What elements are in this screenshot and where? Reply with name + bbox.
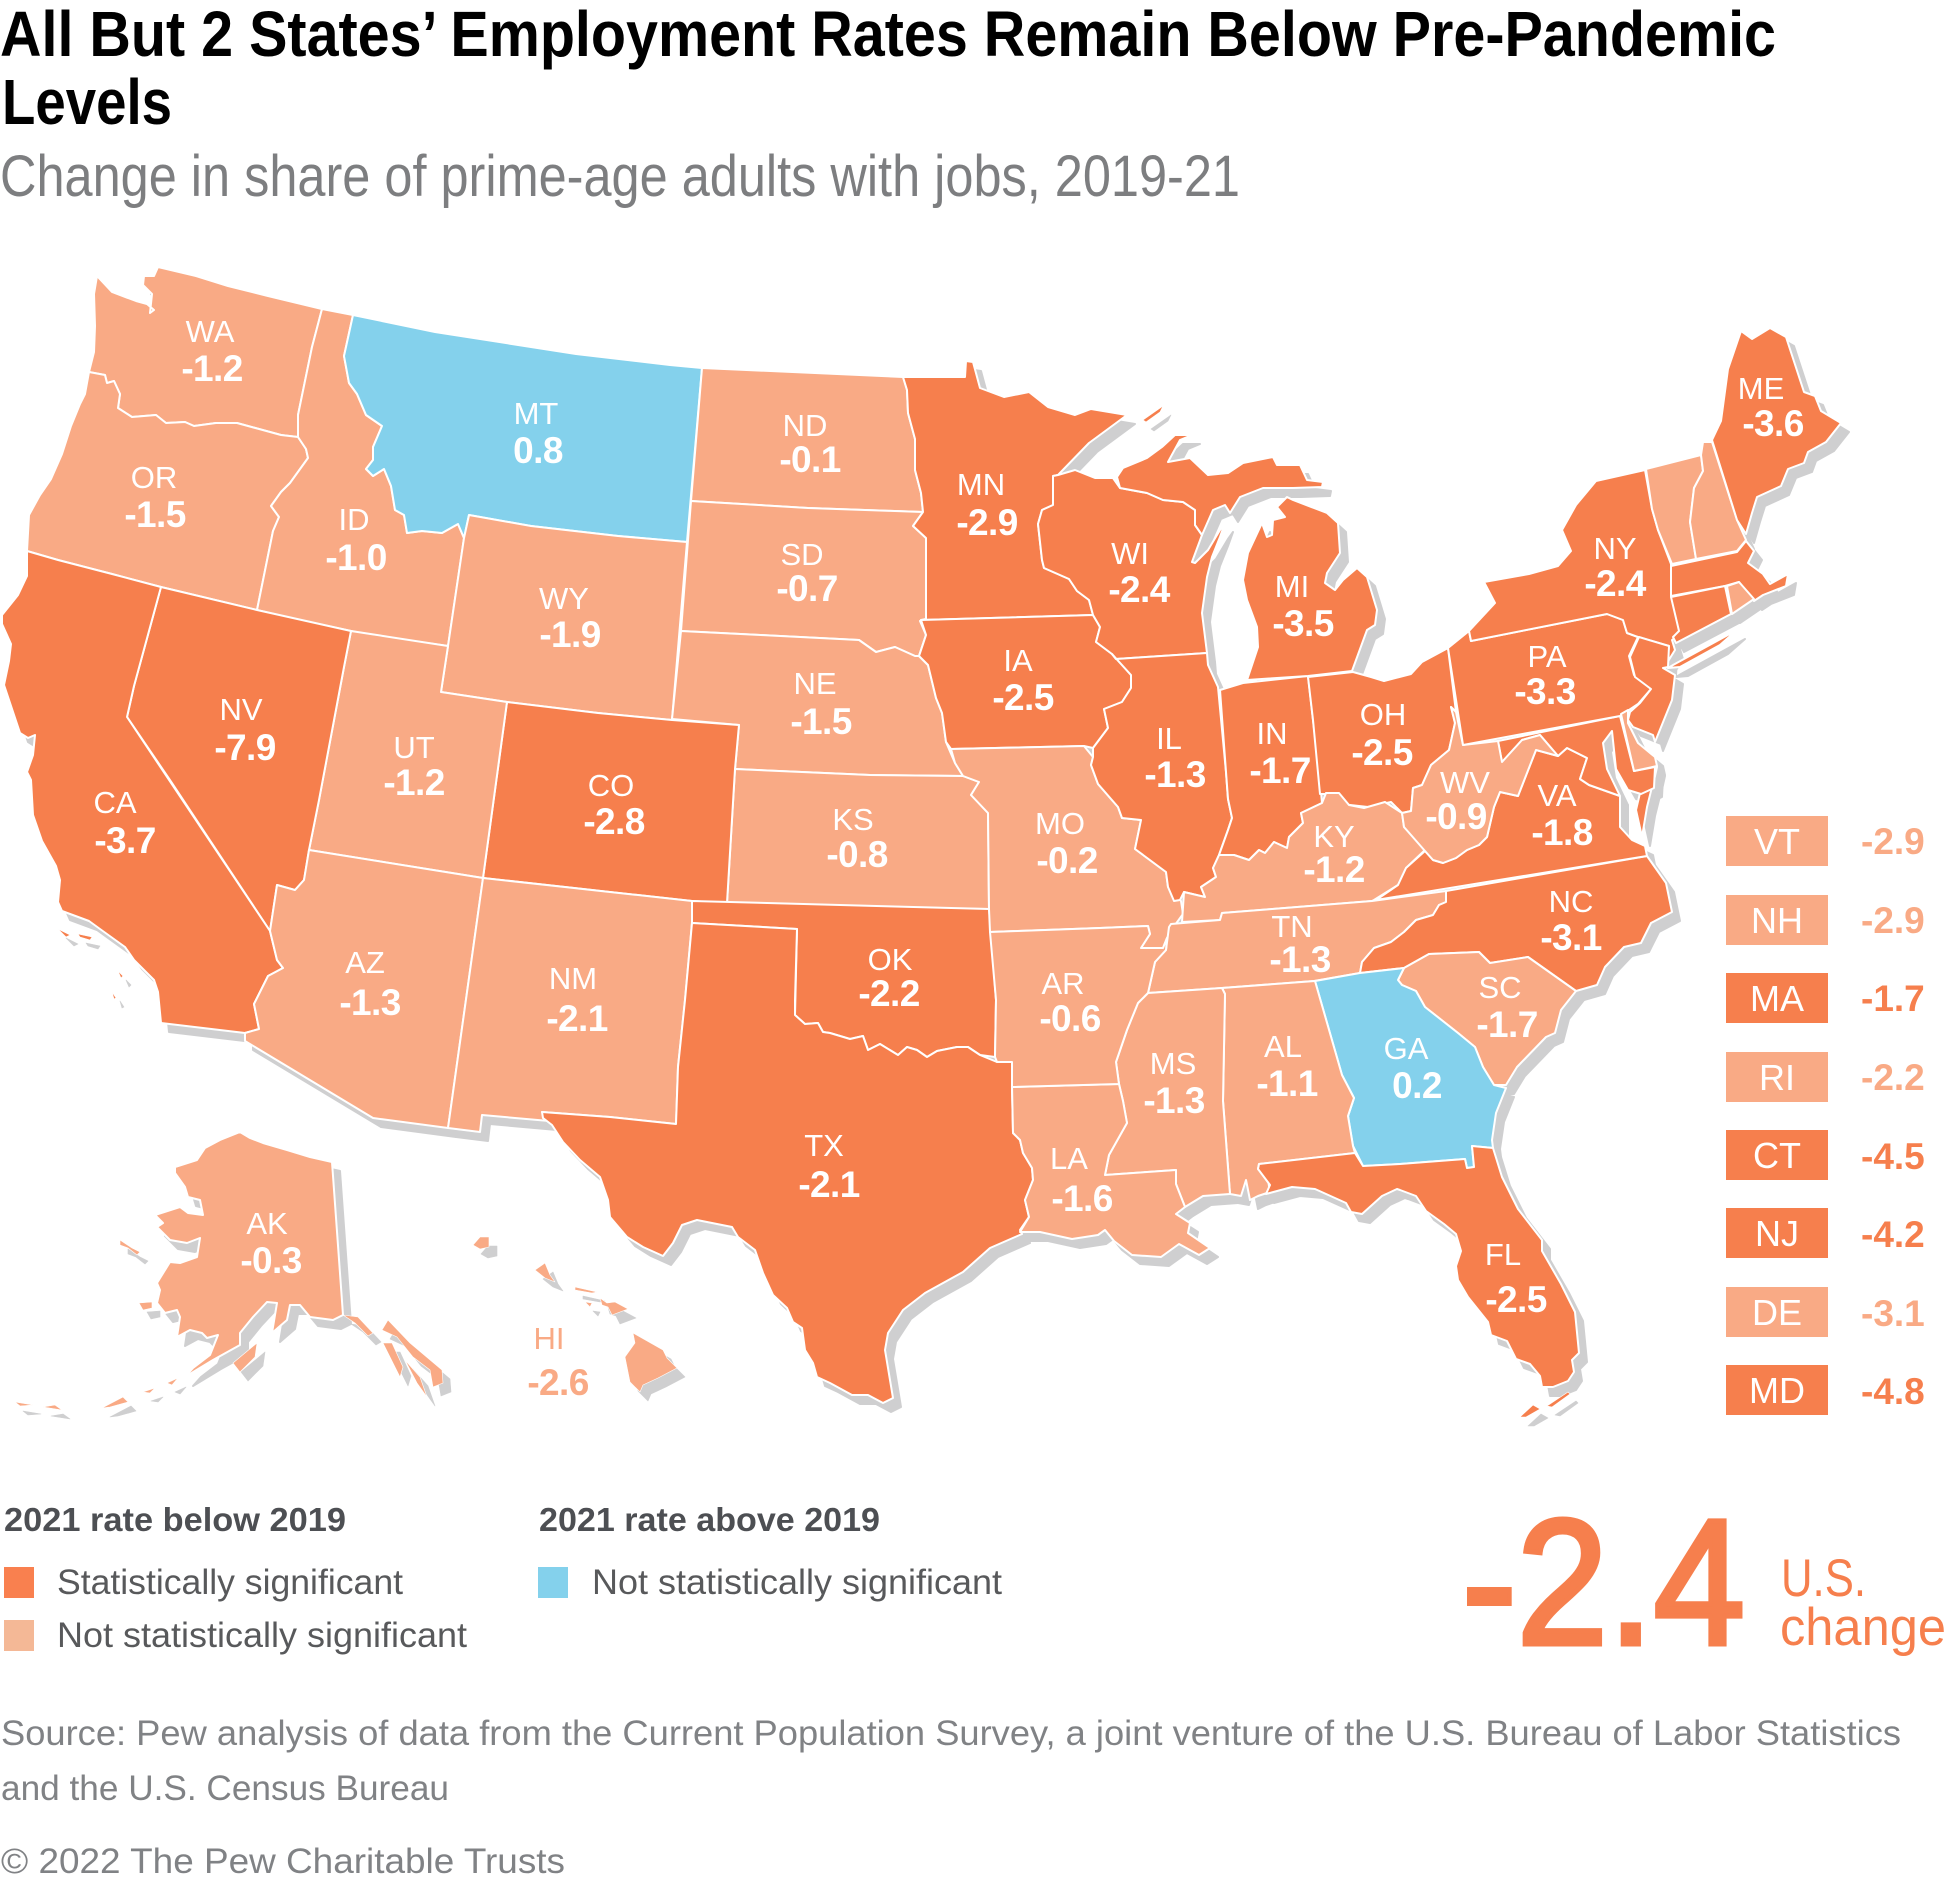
state: TN — [1148, 891, 1446, 993]
label: CO: -2.8 — [583, 801, 645, 842]
label: TN — [1269, 909, 1331, 980]
side item: CT: -4.5 — [1861, 1136, 1925, 1177]
label: AZ — [339, 945, 401, 1023]
label: SD: SD — [780, 537, 824, 572]
label: MT — [513, 396, 563, 471]
label: NV: NV — [219, 692, 263, 727]
label: IN: -1.7 — [1249, 750, 1311, 791]
side item: DE: DE — [1752, 1292, 1802, 1333]
label: OK: OK — [868, 942, 913, 977]
island: Santa Catalina — [118, 971, 123, 978]
side item: MA: -1.7 — [1861, 978, 1925, 1019]
side item: DE: -3.1 — [1861, 1293, 1925, 1334]
state: VT — [1646, 455, 1703, 564]
island: Aleutians central — [143, 1388, 155, 1393]
label: CA: -3.7 — [94, 820, 156, 861]
label: MT: MT — [514, 396, 558, 431]
legend: rate below 2019 — [4, 1501, 467, 1655]
state: MI lower peninsula — [1243, 497, 1377, 680]
label: TN: -1.3 — [1269, 939, 1331, 980]
state: AR — [990, 926, 1167, 1087]
label: MO — [1035, 806, 1098, 881]
callout label: change — [1780, 1598, 1946, 1657]
legend text: above not significant: Not statistically significant — [592, 1563, 1002, 1602]
label: OR — [124, 460, 186, 535]
state: IA — [919, 615, 1131, 749]
state: GA — [1315, 968, 1506, 1168]
island: Long Island — [1668, 630, 1737, 668]
label: CO: CO — [588, 768, 634, 803]
state: DE — [1621, 710, 1657, 771]
label: NY: NY — [1593, 531, 1637, 566]
state: CO — [483, 702, 739, 903]
label: AL: AL — [1264, 1029, 1302, 1064]
label: TX: TX — [804, 1128, 844, 1163]
label: NY: -2.4 — [1584, 563, 1647, 604]
label: VA — [1531, 778, 1593, 853]
label: LA — [1050, 1141, 1113, 1219]
island: Alaska panhandle island B — [405, 1360, 427, 1397]
label: WA — [181, 314, 243, 389]
state: OH — [1308, 648, 1456, 813]
side item: MD: MD — [1749, 1370, 1805, 1411]
label: NM: -2.1 — [546, 998, 608, 1039]
label: MS — [1143, 1046, 1205, 1121]
label: WV: -0.9 — [1425, 796, 1487, 837]
label: IN: IN — [1256, 716, 1288, 751]
island: Kodiak — [233, 1343, 257, 1372]
state: LA — [1012, 1084, 1210, 1257]
big number: -2.4 — [1462, 1482, 1745, 1682]
legend text: significant: Statistically significant — [57, 1563, 403, 1602]
label: ME — [1738, 371, 1804, 444]
side item: VT: -2.9 — [1861, 821, 1925, 862]
side item: NH — [1726, 895, 1925, 945]
label: NC — [1540, 884, 1602, 958]
state: NE — [672, 631, 963, 776]
island: Aleutians western — [43, 1405, 62, 1410]
label: GA: GA — [1384, 1031, 1429, 1066]
label: AK: -0.3 — [240, 1240, 302, 1281]
state: SC — [1398, 952, 1576, 1085]
label: ID — [325, 502, 387, 578]
label: CO — [583, 768, 645, 842]
island: St. Lawrence — [120, 1240, 140, 1255]
label: NY — [1584, 531, 1647, 604]
state: CA — [2, 551, 283, 1033]
label: AR: AR — [1041, 966, 1085, 1001]
label: OK — [858, 942, 920, 1014]
label: TN: TN — [1271, 909, 1313, 944]
state: AZ — [245, 850, 483, 1128]
label: PA: PA — [1527, 639, 1567, 674]
side item: CT: CT — [1753, 1135, 1801, 1176]
island: Hawaii — [625, 1333, 677, 1392]
label: SC: -1.7 — [1476, 1004, 1538, 1045]
label: WA: -1.2 — [181, 348, 243, 389]
label: OR: -1.5 — [124, 494, 186, 535]
side list: small northeastern states — [1726, 816, 1925, 1415]
label: KY: KY — [1313, 819, 1355, 854]
state labels — [93, 314, 1804, 1403]
label: AK: AK — [246, 1206, 288, 1241]
label: ND: ND — [783, 408, 827, 443]
label: IA: IA — [1003, 643, 1033, 678]
label: MS: -1.3 — [1143, 1080, 1205, 1121]
state: OR — [27, 372, 308, 610]
label: AZ: AZ — [345, 945, 385, 980]
island: Maui — [600, 1298, 628, 1315]
state: AL — [1222, 981, 1355, 1200]
label: IL: IL — [1156, 721, 1182, 756]
island: San Clemente — [112, 992, 116, 999]
label: NV — [214, 692, 276, 768]
label: MN: -2.9 — [956, 502, 1018, 543]
state: AK — [155, 1132, 343, 1377]
island: Florida Keys — [1547, 1392, 1570, 1407]
label: LA: LA — [1050, 1141, 1088, 1176]
label: WA: WA — [186, 314, 235, 349]
label: KS — [826, 802, 888, 875]
label: TX — [798, 1128, 860, 1205]
state: FL — [1258, 1146, 1579, 1387]
label: OH: OH — [1360, 697, 1406, 732]
label: IL: -1.3 — [1144, 754, 1206, 795]
label: NC: NC — [1549, 884, 1593, 919]
state: MS — [1105, 988, 1230, 1207]
label: IA — [992, 643, 1054, 718]
label: IN — [1249, 716, 1311, 791]
state: WY — [441, 515, 687, 720]
label: TX: -2.1 — [798, 1164, 860, 1205]
state: WA — [89, 267, 322, 437]
state: MA — [1671, 541, 1788, 601]
island: Oahu — [535, 1263, 555, 1282]
callout: U.S. change — [1462, 1482, 1946, 1682]
label: FL — [1485, 1237, 1547, 1320]
legend swatch: above not significant — [538, 1567, 568, 1598]
label: CA — [93, 785, 156, 861]
label: SC — [1476, 970, 1538, 1045]
state: WI — [1038, 470, 1225, 659]
state: IL — [1091, 653, 1232, 901]
state: NC — [1360, 856, 1672, 991]
state: NJ — [1628, 637, 1675, 742]
legend: rate above 2019 — [538, 1501, 1002, 1602]
label: SC: SC — [1478, 970, 1522, 1005]
label: IA: -2.5 — [992, 677, 1054, 718]
island: Aleutians far west — [15, 1402, 33, 1406]
label: PA: -3.3 — [1514, 671, 1576, 712]
label: ID: -1.0 — [325, 537, 387, 578]
state: RI — [1727, 582, 1754, 614]
label: NE — [790, 666, 852, 742]
state: MN — [903, 361, 1127, 620]
callout label: U.S. — [1781, 1549, 1866, 1608]
state: MD — [1498, 716, 1655, 796]
state: CT — [1671, 586, 1731, 643]
label: WI: -2.4 — [1108, 569, 1171, 610]
label: ND: -0.1 — [779, 439, 841, 480]
legend text: not significant: Not statistically significant — [57, 1616, 467, 1655]
label: ME: -3.6 — [1742, 403, 1804, 444]
label: OH — [1351, 697, 1413, 773]
label: UT: UT — [393, 730, 435, 765]
label: ME: ME — [1738, 371, 1784, 406]
label: MT: 0.8 — [513, 430, 563, 471]
state: UT — [309, 631, 507, 878]
label: IL — [1144, 721, 1206, 795]
label: KY — [1303, 819, 1365, 890]
state: TX — [542, 923, 1033, 1403]
label: GA — [1384, 1031, 1442, 1106]
side item: NJ: -4.2 — [1861, 1214, 1925, 1255]
state: ID — [257, 309, 464, 646]
label: MN: MN — [957, 467, 1005, 502]
label: WV: WV — [1440, 765, 1490, 800]
state: VA eastern shore — [1636, 767, 1657, 837]
state: SD — [681, 501, 926, 656]
label: AZ: -1.3 — [339, 982, 401, 1023]
state: ND — [691, 368, 923, 512]
label: OK: -2.2 — [858, 973, 920, 1014]
state: MT — [344, 315, 702, 542]
island: Florida Keys west — [1520, 1405, 1540, 1417]
label: NE: NE — [793, 666, 837, 701]
label: UT: -1.2 — [383, 762, 445, 803]
state: KY — [1182, 793, 1425, 922]
island: Alaska panhandle mainland — [382, 1320, 443, 1387]
label: UT — [383, 730, 445, 803]
label: WI — [1108, 536, 1171, 610]
source note: Source: Pew analysis of data from the Current Population Survey, a joint venture of the U.S. Bureau of Labor Statistics — [1, 1714, 1901, 1753]
side item: NJ — [1726, 1208, 1925, 1258]
side item: MA: MA — [1750, 978, 1804, 1019]
island: Alaska panhandle island A — [383, 1343, 403, 1377]
island: Nunivak — [139, 1302, 152, 1310]
state: VA — [1376, 748, 1647, 900]
side item: MD: -4.8 — [1861, 1371, 1925, 1412]
label: KS: -0.8 — [826, 834, 888, 875]
label: MI: MI — [1275, 569, 1309, 604]
label: AR — [1039, 966, 1101, 1039]
state: NY — [1469, 470, 1680, 663]
label: NC: -3.1 — [1540, 917, 1602, 958]
side item: MA — [1726, 973, 1925, 1023]
label: NM: NM — [549, 961, 597, 996]
title: Levels — [2, 66, 172, 138]
island: Isle Royale — [1143, 406, 1163, 422]
label: ID: ID — [338, 502, 370, 537]
state: WV — [1402, 707, 1558, 863]
label: GA: 0.2 — [1392, 1065, 1442, 1106]
side item: VT: VT — [1754, 821, 1800, 862]
side item: RI: -2.2 — [1861, 1057, 1925, 1098]
label: MO: -0.2 — [1036, 840, 1098, 881]
label: MN — [956, 467, 1018, 543]
source note: and the U.S. Census Bureau — [1, 1769, 449, 1808]
label: KS: KS — [832, 802, 874, 837]
label: SD: -0.7 — [776, 568, 838, 609]
state: PA — [1448, 614, 1651, 745]
label: WY — [539, 581, 601, 655]
label: AK — [240, 1206, 302, 1281]
state: MI upper peninsula — [1117, 435, 1323, 535]
label: HI — [527, 1321, 589, 1403]
island: California channel central — [78, 934, 92, 940]
label: MS: MS — [1150, 1046, 1196, 1081]
map: state shapes — [2, 267, 1841, 1417]
label: HI: HI — [534, 1321, 564, 1356]
legend swatch: significant — [4, 1567, 34, 1598]
side item: NJ: NJ — [1755, 1213, 1799, 1254]
state: NV — [127, 587, 351, 931]
island: Alaska panhandle strip — [343, 1315, 373, 1336]
label: PA — [1514, 639, 1576, 712]
label: OR: OR — [131, 460, 177, 495]
label: NE: -1.5 — [790, 701, 852, 742]
label: WV — [1425, 765, 1490, 837]
legend heading: below: 2021 rate below 2019 — [4, 1501, 346, 1538]
label: KY: -1.2 — [1303, 849, 1365, 890]
state: NM — [448, 878, 692, 1132]
label: LA: -1.6 — [1051, 1178, 1113, 1219]
state: OK — [692, 901, 996, 1057]
side item: MD — [1726, 1365, 1925, 1415]
label: FL: FL — [1485, 1237, 1521, 1272]
side item: DE — [1726, 1287, 1925, 1337]
label: HI: -2.6 — [527, 1362, 589, 1403]
island: Aleutians — [102, 1397, 128, 1408]
island: Molokai — [575, 1287, 597, 1293]
island: Kauai — [473, 1237, 489, 1249]
label: OH: -2.5 — [1351, 732, 1413, 773]
label: MO: MO — [1035, 806, 1085, 841]
state: NH — [1690, 442, 1746, 559]
label: VA: VA — [1537, 778, 1577, 813]
side item: CT — [1726, 1130, 1925, 1180]
label: ND — [779, 408, 841, 480]
island: California channel west — [58, 929, 70, 937]
state: KS — [727, 769, 989, 909]
label: AR: -0.6 — [1039, 998, 1101, 1039]
side item: NH: -2.9 — [1861, 900, 1925, 941]
state: ME — [1712, 328, 1841, 534]
label: FL: -2.5 — [1485, 1279, 1547, 1320]
label: NV: -7.9 — [214, 727, 276, 768]
copyright: © 2022 The Pew Charitable Trusts — [1, 1842, 565, 1881]
side item: NH: NH — [1751, 900, 1803, 941]
side item: RI — [1726, 1052, 1925, 1102]
label: MI: -3.5 — [1272, 603, 1334, 644]
label: VA: -1.8 — [1531, 812, 1593, 853]
label: SD — [776, 537, 838, 609]
label: WY: WY — [539, 581, 589, 616]
label: NM — [546, 961, 608, 1039]
label: WI: WI — [1111, 536, 1149, 571]
legend swatch: not significant — [4, 1620, 34, 1651]
state: IN — [1219, 676, 1322, 860]
label: AL: -1.1 — [1256, 1063, 1318, 1104]
side item: VT — [1726, 816, 1925, 866]
island: Aleutians east — [167, 1378, 178, 1385]
legend heading: above: 2021 rate above 2019 — [539, 1501, 880, 1538]
subtitle: Change in share of prime-age adults with jobs, 2019-21 — [0, 144, 1240, 209]
island: Lanai — [585, 1302, 592, 1307]
label: AL — [1256, 1029, 1318, 1104]
label: MI — [1272, 569, 1334, 644]
state: MO — [951, 746, 1183, 948]
side item: RI: RI — [1759, 1057, 1795, 1098]
label: WY: -1.9 — [539, 614, 601, 655]
label: CA: CA — [93, 785, 137, 820]
